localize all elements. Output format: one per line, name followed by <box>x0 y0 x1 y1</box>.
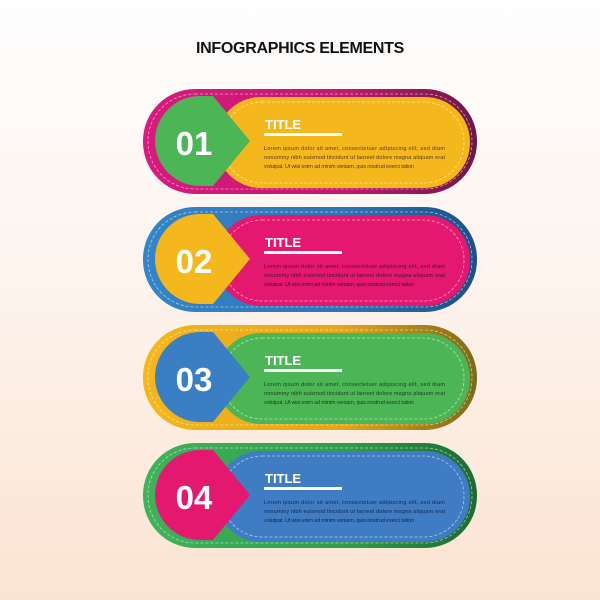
text 2: Lorem ipsum dolor sit amet, consectetuer adipiscing elit, sed diam <box>264 264 445 270</box>
text 3: volutpat. Ut wisi enim ad minim veniam, quis nostrud exerci tation <box>264 400 414 406</box>
text 1: volutpat. Ut wisi enim ad minim veniam, quis nostrud exerci tation <box>264 164 414 170</box>
badge 4 <box>155 450 250 540</box>
text 1 <box>264 117 445 170</box>
badge 3 <box>155 332 250 422</box>
card 1 <box>143 89 477 194</box>
badge 1 <box>155 96 250 186</box>
text 4: TITLE <box>265 471 301 486</box>
text 2: TITLE <box>265 235 301 250</box>
text 4: nonummy nibh euismod tincidunt ut laoreet dolore magna aliquam erat <box>264 509 445 515</box>
text 2 <box>264 235 445 288</box>
card 2 <box>143 207 477 312</box>
badge 2 <box>155 214 250 304</box>
text 4: volutpat. Ut wisi enim ad minim veniam, quis nostrud exerci tation <box>264 518 414 524</box>
card 4 <box>143 443 477 548</box>
text 1: Lorem ipsum dolor sit amet, consectetuer adipiscing elit, sed diam <box>264 146 445 152</box>
title: INFOGRAPHICS ELEMENTS <box>196 40 405 57</box>
text 2: nonummy nibh euismod tincidunt ut laoreet dolore magna aliquam erat <box>264 273 445 279</box>
text 3: TITLE <box>265 353 301 368</box>
card 3 <box>143 325 477 430</box>
text 1: TITLE <box>265 117 301 132</box>
text 3: Lorem ipsum dolor sit amet, consectetuer adipiscing elit, sed diam <box>264 382 445 388</box>
text 4 <box>264 471 445 524</box>
card 3: 03 <box>176 361 212 398</box>
text 3 <box>264 353 445 406</box>
text 2: volutpat. Ut wisi enim ad minim veniam, quis nostrud exerci tation <box>264 282 414 288</box>
card 4: 04 <box>176 479 213 516</box>
text 1: nonummy nibh euismod tincidunt ut laoreet dolore magna aliquam erat <box>264 155 445 161</box>
text 3: nonummy nibh euismod tincidunt ut laoreet dolore magna aliquam erat <box>264 391 445 397</box>
text 4: Lorem ipsum dolor sit amet, consectetuer adipiscing elit, sed diam <box>264 500 445 506</box>
card 1: 01 <box>176 125 212 162</box>
card 2: 02 <box>176 243 212 280</box>
